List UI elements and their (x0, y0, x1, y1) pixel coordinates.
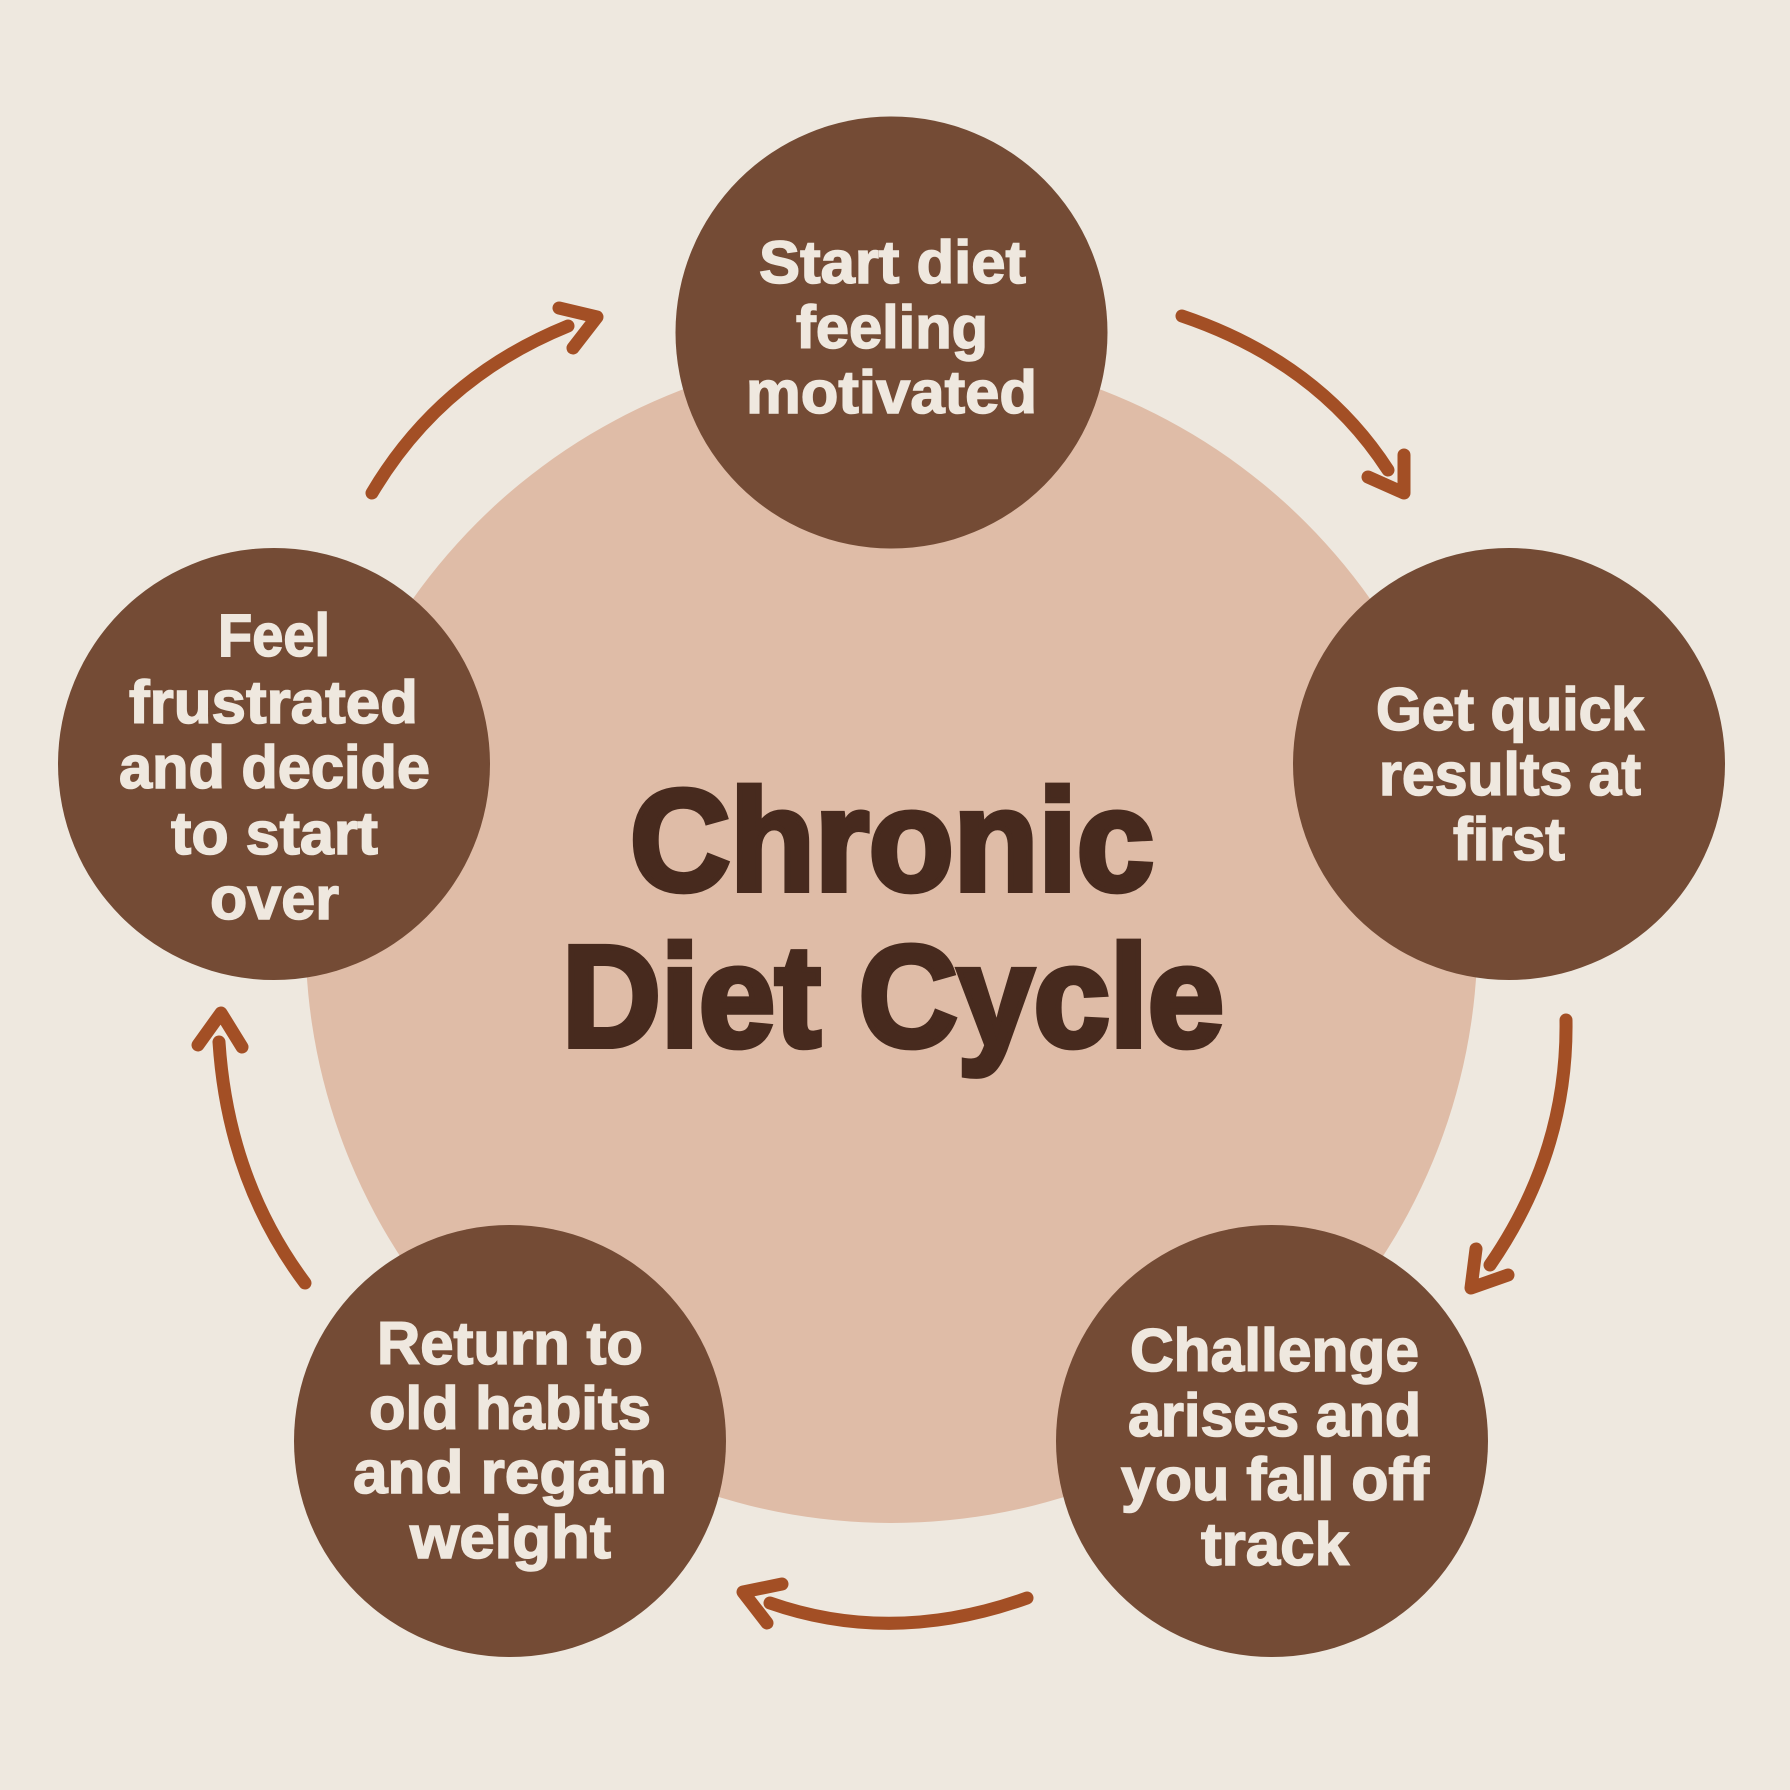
title (562, 760, 1224, 1077)
step 2: quick results: results at (1379, 741, 1641, 808)
step 3: challenge arises: track (1201, 1511, 1350, 1578)
step 2: quick results: first (1453, 806, 1565, 873)
step 4: return to old habits: Return to (377, 1310, 643, 1377)
arrow: step 2 to step 3 (1471, 1020, 1566, 1288)
step 1: start diet: Start diet (759, 229, 1026, 296)
step 3: challenge arises: Challenge (1130, 1317, 1419, 1384)
step 5: feel frustrated (58, 548, 490, 980)
step 1: start diet: feeling (796, 294, 988, 361)
central background circle (306, 351, 1478, 1523)
step 3: challenge arises: arises and (1128, 1382, 1421, 1449)
step 2: quick results: Get quick (1376, 676, 1645, 743)
title: Chronic (630, 760, 1154, 921)
step 5: feel frustrated: over (210, 865, 339, 932)
arrow: step 3 to step 4 (743, 1584, 1027, 1623)
arrow: step 4 to step 5 (198, 1013, 305, 1283)
step 4: return to old habits: old habits (369, 1375, 651, 1442)
title: Diet Cycle (562, 916, 1224, 1077)
arrow: step 1 to step 2 (1182, 316, 1404, 493)
step 4: return to old habits (294, 1225, 726, 1657)
step 5: feel frustrated: to start (171, 800, 378, 867)
step 4: return to old habits: and regain (353, 1439, 667, 1506)
step 3: challenge arises (1056, 1225, 1488, 1657)
step 5: feel frustrated: Feel (218, 602, 330, 669)
step 3: challenge arises: you fall off (1121, 1446, 1430, 1513)
step 1: start diet (676, 116, 1108, 548)
step 4: return to old habits: weight (409, 1504, 611, 1571)
step 1: start diet: motivated (746, 359, 1037, 426)
step 5: feel frustrated: frustrated (129, 669, 418, 736)
step 5: feel frustrated: and decide (119, 734, 430, 801)
step 2: quick results (1293, 548, 1725, 980)
arrow: step 5 to step 1 (372, 308, 597, 493)
